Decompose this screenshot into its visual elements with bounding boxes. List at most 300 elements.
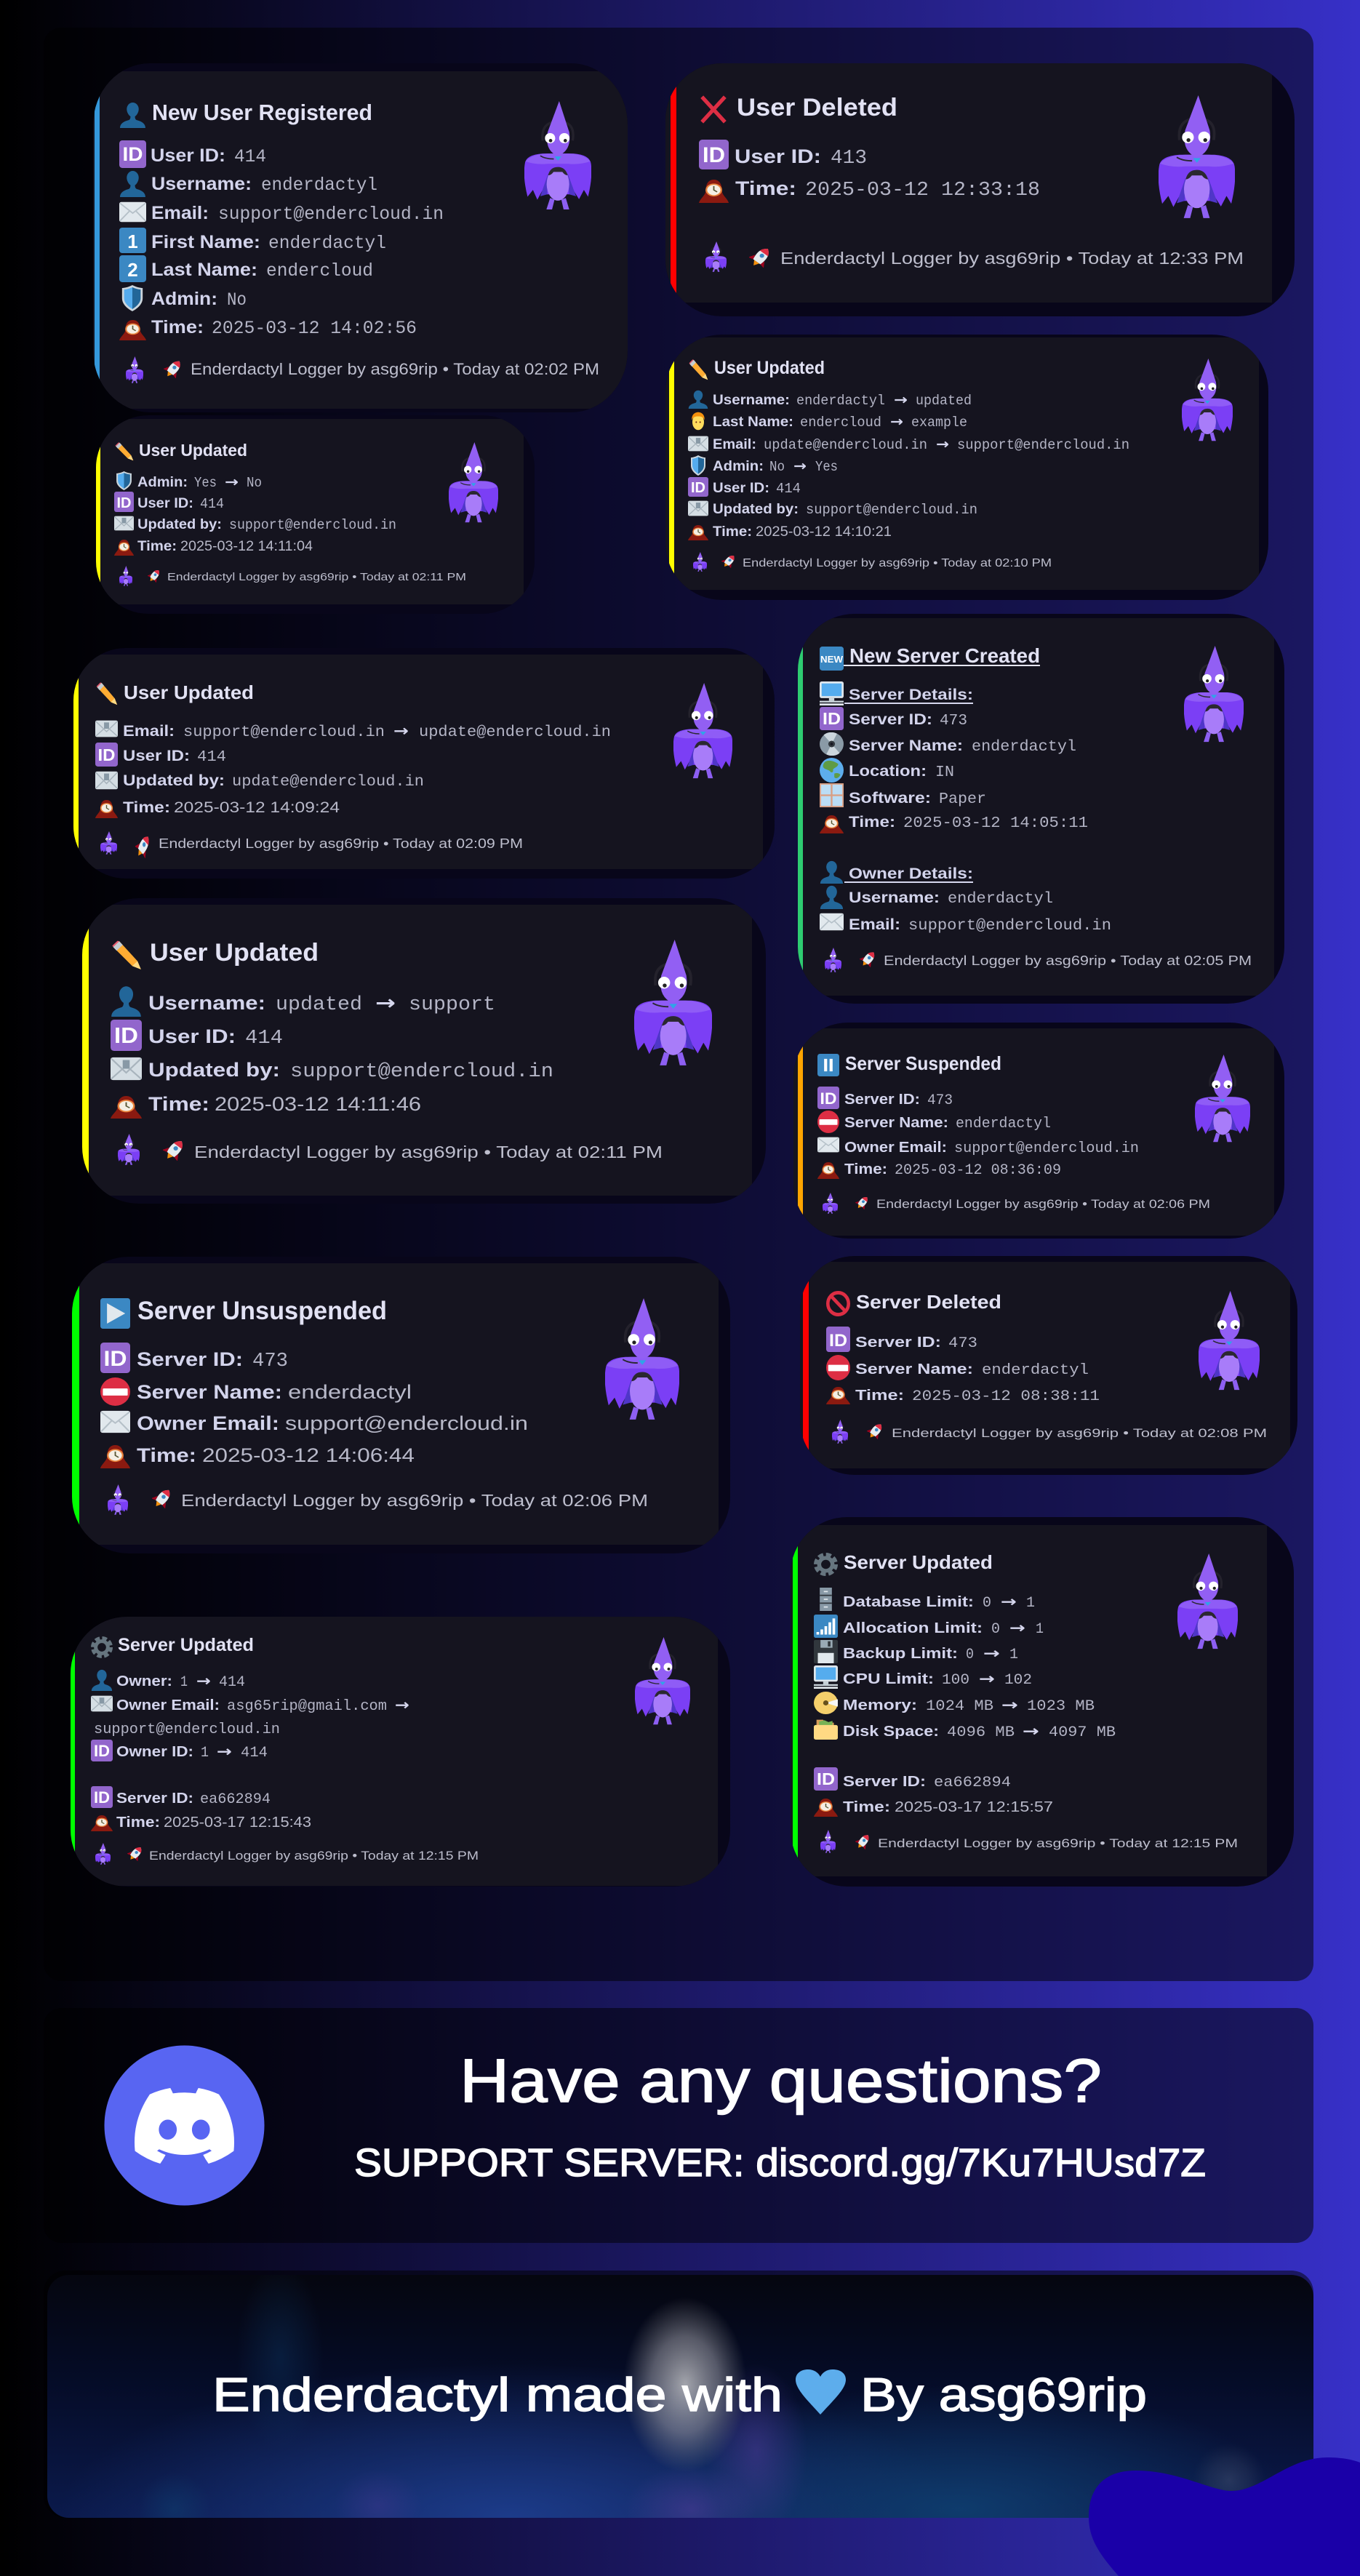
row: time: 2025-03-12 12:33:18 bbox=[805, 180, 1040, 201]
row: memory: Memory: bbox=[843, 1697, 917, 1713]
card: new server created bbox=[798, 614, 1284, 1004]
row: server name: Server Name: bbox=[137, 1381, 282, 1403]
row: admin: No bbox=[769, 459, 785, 475]
mascot bbox=[1199, 1291, 1260, 1390]
row: updated by: Updated by: bbox=[713, 502, 799, 517]
row: time: 2025-03-17 12:15:57 bbox=[895, 1799, 1053, 1815]
row: admin bbox=[116, 471, 262, 491]
row: username: Username: bbox=[849, 889, 940, 906]
row: server details: Server Details: bbox=[849, 687, 973, 703]
card: server updated (owner) bbox=[71, 1617, 730, 1887]
row: updated by: Updated by: bbox=[123, 772, 225, 789]
row: memory: → bbox=[1001, 1696, 1018, 1713]
card: new user registered bbox=[93, 63, 628, 412]
row: server id: Server ID: bbox=[844, 1092, 920, 1108]
row: server id bbox=[826, 1327, 977, 1352]
row: time: 2025-03-12 14:09:24 bbox=[174, 799, 340, 816]
row: server id: ID bbox=[829, 1331, 847, 1351]
row: username: enderdactyl bbox=[261, 175, 377, 196]
row: owner: 1 bbox=[180, 1674, 188, 1691]
row: last name bbox=[119, 255, 373, 282]
text: made with: Enderdactyl made with bbox=[212, 2368, 783, 2421]
row: last name: → bbox=[890, 414, 903, 430]
row: admin bbox=[691, 455, 838, 476]
row: username: enderdactyl bbox=[796, 393, 885, 409]
row: server id: Server ID: bbox=[849, 711, 932, 728]
row: owner email bbox=[91, 1696, 409, 1715]
row: email: update@endercloud.in bbox=[419, 724, 611, 741]
row: username: Username: bbox=[148, 992, 265, 1014]
row: time: Time: bbox=[843, 1799, 890, 1815]
footer bbox=[108, 1484, 648, 1515]
row: server name: enderdactyl bbox=[288, 1381, 412, 1403]
row: allocation limit: Allocation Limit: bbox=[843, 1620, 983, 1636]
row: last name: 2 bbox=[127, 259, 138, 281]
row: time bbox=[114, 539, 313, 556]
row: server id: ea662894 bbox=[200, 1791, 271, 1808]
row: owner: Owner: bbox=[116, 1673, 172, 1689]
row: allocation limit: → bbox=[1009, 1619, 1025, 1636]
row: time: 2025-03-12 14:11:04 bbox=[180, 539, 313, 554]
row: user id bbox=[95, 743, 226, 767]
row: server name: Server Name: bbox=[849, 737, 963, 754]
row: location: IN bbox=[935, 764, 954, 781]
row: email bbox=[119, 202, 444, 225]
row: time bbox=[814, 1799, 1053, 1817]
row: time bbox=[699, 177, 1040, 203]
title: User Deleted bbox=[737, 94, 897, 121]
row: updated by: update@endercloud.in bbox=[232, 774, 424, 791]
row: owner email bbox=[100, 1411, 528, 1434]
row: server id: Server ID: bbox=[137, 1348, 243, 1370]
footer: Enderdactyl Logger by asg69rip • Today at 02:06 PM bbox=[876, 1197, 1210, 1211]
row: location: Location: bbox=[849, 763, 927, 780]
row: time bbox=[95, 799, 340, 818]
row: disk space: → bbox=[1023, 1722, 1039, 1740]
footer: Enderdactyl Logger by asg69rip • Today at 12:33 PM bbox=[780, 249, 1244, 268]
row: email: Email: bbox=[151, 203, 209, 223]
panel: credits bbox=[44, 2262, 1313, 2576]
row: user id bbox=[114, 492, 224, 512]
row: cpu limit: 100 bbox=[942, 1672, 969, 1689]
title: Server Unsuspended bbox=[137, 1297, 387, 1325]
row: email bbox=[95, 721, 611, 741]
row: memory bbox=[814, 1692, 1095, 1715]
row: time: Time: bbox=[855, 1388, 904, 1404]
row: server id: ID bbox=[817, 1769, 835, 1788]
row: time: Time: bbox=[116, 1815, 160, 1831]
row: email: Email: bbox=[123, 723, 175, 740]
row: server id bbox=[820, 707, 967, 730]
row: database limit: Database Limit: bbox=[843, 1594, 974, 1610]
row: user id: User ID: bbox=[137, 496, 193, 511]
blurred photo background bbox=[47, 2262, 1313, 2576]
row: user id: ID bbox=[116, 495, 131, 511]
footer: Enderdactyl Logger by asg69rip • Today at 02:10 PM bbox=[743, 557, 1052, 569]
row: user id: 414 bbox=[776, 481, 801, 497]
row: time: 2025-03-12 14:06:44 bbox=[202, 1444, 415, 1466]
row: time: 2025-03-17 12:15:43 bbox=[164, 1815, 311, 1831]
text: support server link: SUPPORT SERVER: discord.gg/7Ku7HUsd7Z bbox=[354, 2141, 1206, 2185]
row: last name bbox=[692, 412, 967, 431]
row: admin: → bbox=[225, 474, 239, 490]
row: time: Time: bbox=[735, 177, 796, 199]
row: time bbox=[111, 1093, 421, 1119]
row: software bbox=[820, 784, 986, 808]
row: email: → bbox=[393, 722, 409, 740]
row: user id: 414 bbox=[197, 749, 226, 766]
row: server name bbox=[820, 732, 1076, 756]
icon: discord bbox=[105, 2045, 265, 2205]
row: admin: Admin: bbox=[151, 289, 217, 309]
title: New Server Created bbox=[849, 644, 1040, 667]
row: time: 2025-03-12 08:38:11 bbox=[912, 1388, 1100, 1405]
row: user id: ID bbox=[691, 480, 705, 496]
row: updated by bbox=[688, 501, 977, 518]
footer: Enderdactyl Logger by asg69rip • Today at 12:15 PM bbox=[149, 1849, 479, 1863]
row: owner id: 1 bbox=[201, 1745, 209, 1761]
row: server name bbox=[817, 1111, 1051, 1133]
card: user updated (admin yes to no) bbox=[96, 415, 535, 614]
row: server id: ea662894 bbox=[934, 1775, 1011, 1791]
row: user id bbox=[111, 1020, 283, 1051]
row: cpu limit bbox=[814, 1665, 1032, 1689]
row: username: updated bbox=[916, 393, 972, 409]
row: last name: example bbox=[911, 415, 967, 431]
row: time: Time: bbox=[844, 1161, 887, 1177]
row: email bbox=[688, 436, 1129, 453]
icon: blue heart bbox=[796, 2369, 846, 2415]
row: admin bbox=[122, 285, 247, 311]
row: time bbox=[119, 320, 416, 340]
row: email: update@endercloud.in bbox=[764, 437, 927, 453]
row: time: Time: bbox=[849, 814, 895, 831]
row: database limit: → bbox=[1001, 1593, 1017, 1610]
row: time bbox=[826, 1387, 1100, 1405]
row: user id: 414 bbox=[200, 496, 224, 512]
footer bbox=[118, 1134, 663, 1165]
row: cpu limit: CPU Limit: bbox=[843, 1671, 934, 1687]
row: time: 2025-03-12 14:02:56 bbox=[212, 318, 417, 339]
footer bbox=[95, 1843, 479, 1865]
row: email: → bbox=[936, 436, 949, 452]
row: server id: ID bbox=[820, 1089, 836, 1108]
row: user id: 413 bbox=[831, 148, 867, 169]
row: disk space: 4096 MB bbox=[947, 1724, 1015, 1741]
title: User Updated bbox=[139, 441, 247, 460]
row: admin: Admin: bbox=[713, 459, 764, 474]
footer bbox=[825, 948, 1252, 972]
title: Server Deleted bbox=[856, 1291, 1001, 1313]
mascot bbox=[1184, 646, 1244, 742]
row: updated by: support@endercloud.in bbox=[229, 517, 396, 533]
row: last name: Last Name: bbox=[151, 260, 257, 280]
row: updated by bbox=[95, 772, 424, 791]
row: backup limit: 1 bbox=[1009, 1647, 1018, 1663]
footer bbox=[126, 356, 599, 383]
footer: Enderdactyl Logger by asg69rip • Today at 02:05 PM bbox=[884, 953, 1252, 968]
row: server details bbox=[820, 681, 973, 705]
title: Server Updated bbox=[118, 1635, 254, 1655]
row: cpu limit: 102 bbox=[1004, 1672, 1032, 1689]
row: user id: User ID: bbox=[151, 145, 225, 166]
row: server name: enderdactyl bbox=[982, 1362, 1089, 1379]
row: username bbox=[689, 391, 972, 409]
row: database limit: 0 bbox=[983, 1595, 991, 1612]
row: owner email: Owner Email: bbox=[844, 1140, 947, 1156]
footer: Enderdactyl Logger by asg69rip • Today at 02:08 PM bbox=[892, 1426, 1267, 1440]
row: time: 2025-03-12 08:36:09 bbox=[895, 1162, 1061, 1179]
footer bbox=[820, 1830, 1238, 1853]
row: time bbox=[820, 814, 1088, 833]
mascot bbox=[635, 1637, 690, 1724]
row: user id bbox=[119, 140, 266, 168]
row: updated by: Updated by: bbox=[148, 1059, 280, 1081]
row: user id bbox=[699, 140, 867, 169]
footer bbox=[693, 552, 1052, 572]
footer bbox=[119, 566, 466, 586]
row: user id: ID bbox=[122, 143, 143, 165]
row: first name bbox=[119, 228, 386, 254]
row: owner email: Owner Email: bbox=[116, 1697, 220, 1713]
row: cpu limit: → bbox=[979, 1670, 995, 1687]
row: allocation limit: 0 bbox=[991, 1621, 1000, 1638]
row: database limit bbox=[820, 1588, 1035, 1612]
title: User Updated bbox=[714, 358, 825, 378]
row: user id bbox=[688, 477, 801, 497]
row: memory: 1023 MB bbox=[1027, 1698, 1095, 1715]
row: updated by bbox=[111, 1057, 553, 1083]
card: user updated (username updated to support) bbox=[82, 898, 766, 1204]
row: username: support bbox=[409, 994, 495, 1016]
card: user updated (username, last name, email, admin) bbox=[665, 335, 1268, 600]
footer: Enderdactyl Logger by asg69rip • Today at 02:06 PM bbox=[181, 1491, 648, 1510]
row: owner email: → bbox=[395, 1696, 409, 1713]
row: time: Time: bbox=[123, 799, 170, 816]
row: server name bbox=[826, 1355, 1089, 1380]
card: server deleted bbox=[800, 1256, 1297, 1475]
row: server id: ID bbox=[823, 709, 841, 728]
row: email: support@endercloud.in bbox=[218, 204, 444, 225]
card: user deleted bbox=[665, 63, 1295, 316]
row: server id: ID bbox=[94, 1788, 110, 1807]
row: allocation limit bbox=[814, 1615, 1044, 1638]
main panel bbox=[44, 28, 1313, 1981]
row: time: Time: bbox=[151, 317, 204, 337]
row: last name: endercloud bbox=[266, 260, 373, 281]
card: user updated (email) bbox=[73, 648, 775, 879]
card: server suspended bbox=[793, 1023, 1284, 1239]
row: user id: 414 bbox=[234, 146, 266, 167]
row: server id: ID bbox=[103, 1347, 127, 1371]
footer: Enderdactyl Logger by asg69rip • Today at 02:11 PM bbox=[167, 571, 466, 583]
mascot bbox=[634, 940, 712, 1065]
row: owner id: → bbox=[217, 1743, 232, 1760]
row: time: Time: bbox=[137, 539, 177, 554]
row: backup limit: → bbox=[983, 1644, 1000, 1662]
row: user id: ID bbox=[114, 1023, 138, 1048]
row: email: Email: bbox=[849, 916, 900, 933]
row: user id: User ID: bbox=[123, 748, 190, 764]
row: owner id: Owner ID: bbox=[116, 1744, 193, 1760]
row: user id: User ID: bbox=[735, 145, 821, 167]
row: email: support@endercloud.in bbox=[183, 724, 385, 741]
row: username: enderdactyl bbox=[948, 891, 1053, 908]
row: server id bbox=[100, 1343, 288, 1373]
row: new owner email: support@endercloud.in bbox=[94, 1721, 280, 1738]
title: NEW bbox=[820, 654, 844, 665]
row: email: support@endercloud.in bbox=[908, 918, 1111, 935]
footer bbox=[705, 241, 1244, 272]
row: server id: 473 bbox=[252, 1351, 288, 1372]
row: updated by bbox=[114, 516, 396, 533]
row: time bbox=[91, 1815, 311, 1831]
row: owner email: Owner Email: bbox=[137, 1412, 279, 1434]
row: admin: → bbox=[793, 458, 807, 474]
row: last name: Last Name: bbox=[713, 415, 793, 430]
row: allocation limit: 1 bbox=[1036, 1621, 1044, 1638]
row: admin: No bbox=[227, 289, 247, 311]
row: username: → bbox=[894, 392, 908, 408]
footer bbox=[832, 1420, 1267, 1444]
row: time bbox=[817, 1161, 1061, 1179]
mascot bbox=[605, 1298, 679, 1420]
row: owner id: 414 bbox=[241, 1745, 268, 1761]
card: server updated (limits) bbox=[791, 1517, 1294, 1887]
row: username: Username: bbox=[151, 174, 252, 194]
row: last name: endercloud bbox=[800, 415, 881, 431]
row: disk space: 4097 MB bbox=[1049, 1724, 1116, 1741]
row: username: updated bbox=[276, 994, 362, 1016]
row: admin: Yes bbox=[194, 475, 217, 491]
row: server name: Server Name: bbox=[855, 1361, 973, 1377]
row: admin: Admin: bbox=[137, 475, 188, 490]
row: email: support@endercloud.in bbox=[957, 437, 1129, 453]
footer: Enderdactyl Logger by asg69rip • Today at 02:09 PM bbox=[159, 836, 523, 851]
row: server id: Server ID: bbox=[116, 1791, 193, 1807]
row: time bbox=[688, 524, 892, 540]
row: database limit: 1 bbox=[1026, 1595, 1035, 1612]
row: user id: 414 bbox=[245, 1028, 283, 1049]
row: email bbox=[820, 913, 1111, 935]
row: disk space bbox=[814, 1720, 1116, 1741]
row: admin: Yes bbox=[815, 459, 838, 475]
row: time: 2025-03-12 14:11:46 bbox=[215, 1093, 421, 1115]
footer: Enderdactyl Logger by asg69rip • Today at 02:02 PM bbox=[191, 360, 599, 378]
row: time bbox=[100, 1444, 415, 1468]
row: owner email: asg65rip@gmail.com bbox=[227, 1698, 387, 1715]
mascot bbox=[449, 442, 498, 522]
row: server id: 473 bbox=[927, 1092, 953, 1109]
title: User Updated bbox=[124, 681, 254, 703]
footer: Enderdactyl Logger by asg69rip • Today at 12:15 PM bbox=[878, 1837, 1238, 1850]
row: user id: User ID: bbox=[713, 481, 769, 496]
row: username bbox=[120, 171, 377, 197]
row: admin: No bbox=[247, 475, 262, 491]
title: User Updated bbox=[150, 939, 319, 967]
row: owner email: support@endercloud.in bbox=[285, 1412, 528, 1434]
heading: have any questions: Have any questions? bbox=[460, 2047, 1102, 2115]
row: owner: → bbox=[196, 1672, 211, 1689]
mascot bbox=[1182, 359, 1233, 441]
row: location bbox=[820, 758, 954, 783]
row: time: 2025-03-12 14:10:21 bbox=[756, 524, 892, 540]
mascot bbox=[1195, 1055, 1250, 1142]
row: backup limit: Backup Limit: bbox=[843, 1646, 958, 1662]
row: updated by: support@endercloud.in bbox=[806, 502, 977, 518]
text: author: By asg69rip bbox=[860, 2368, 1147, 2421]
row: owner details: Owner Details: bbox=[849, 865, 973, 882]
row: user id: ID bbox=[703, 143, 725, 167]
mascot bbox=[1177, 1553, 1238, 1649]
row: backup limit: 0 bbox=[966, 1647, 974, 1663]
row: updated by: Updated by: bbox=[137, 517, 222, 532]
row: first name: First Name: bbox=[151, 232, 260, 252]
row: user id: User ID: bbox=[148, 1025, 236, 1047]
row: owner id: ID bbox=[94, 1742, 110, 1760]
row: owner email: support@endercloud.in bbox=[954, 1140, 1139, 1157]
row: email: Email: bbox=[713, 437, 756, 452]
row: software: Paper bbox=[939, 791, 986, 808]
mascot bbox=[673, 683, 732, 778]
row: username bbox=[111, 986, 495, 1017]
title: New User Registered bbox=[152, 100, 372, 125]
footer bbox=[100, 831, 523, 862]
row: backup limit bbox=[814, 1640, 1018, 1663]
footer: Enderdactyl Logger by asg69rip • Today at 02:11 PM bbox=[194, 1143, 663, 1161]
row: disk space: Disk Space: bbox=[843, 1724, 939, 1740]
row: time: Time: bbox=[148, 1093, 209, 1115]
row: server name: Server Name: bbox=[844, 1115, 948, 1131]
row: server name: enderdactyl bbox=[972, 739, 1076, 756]
row: first name: 1 bbox=[127, 231, 138, 252]
mascot bbox=[524, 101, 591, 209]
row: username bbox=[820, 886, 1053, 909]
row: software: Software: bbox=[849, 790, 931, 807]
footer bbox=[823, 1193, 1210, 1214]
row: owner email bbox=[817, 1137, 1139, 1157]
row: server id bbox=[814, 1767, 1011, 1791]
row: memory: 1024 MB bbox=[926, 1698, 993, 1715]
row: owner id bbox=[91, 1740, 268, 1761]
row: server id: Server ID: bbox=[855, 1335, 941, 1351]
row: owner bbox=[92, 1670, 245, 1691]
row: time: Time: bbox=[713, 524, 752, 540]
row: owner details bbox=[820, 861, 973, 884]
row: username: Username: bbox=[713, 393, 790, 408]
row: updated by: support@endercloud.in bbox=[290, 1061, 553, 1083]
row: time: Time: bbox=[137, 1444, 196, 1466]
row: server id: 473 bbox=[940, 713, 967, 729]
row: server id bbox=[817, 1087, 953, 1109]
decorative corner blob bbox=[1089, 2457, 1360, 2576]
title: Server Suspended bbox=[845, 1052, 1001, 1074]
panel: support server bbox=[44, 2008, 1313, 2243]
mascot bbox=[1159, 95, 1235, 218]
row: first name: enderdactyl bbox=[268, 233, 386, 254]
row: user id: ID bbox=[97, 745, 115, 764]
row: server id: 473 bbox=[948, 1335, 977, 1352]
row: time: 2025-03-12 14:05:11 bbox=[903, 815, 1088, 832]
card: server unsuspended bbox=[72, 1257, 730, 1553]
title: Server Updated bbox=[844, 1551, 993, 1573]
row: server name bbox=[100, 1377, 412, 1406]
title bbox=[120, 103, 371, 128]
row: server name: enderdactyl bbox=[956, 1116, 1051, 1132]
row: server id: Server ID: bbox=[843, 1774, 926, 1790]
row: server id bbox=[91, 1786, 271, 1808]
row: owner: 414 bbox=[219, 1674, 245, 1691]
